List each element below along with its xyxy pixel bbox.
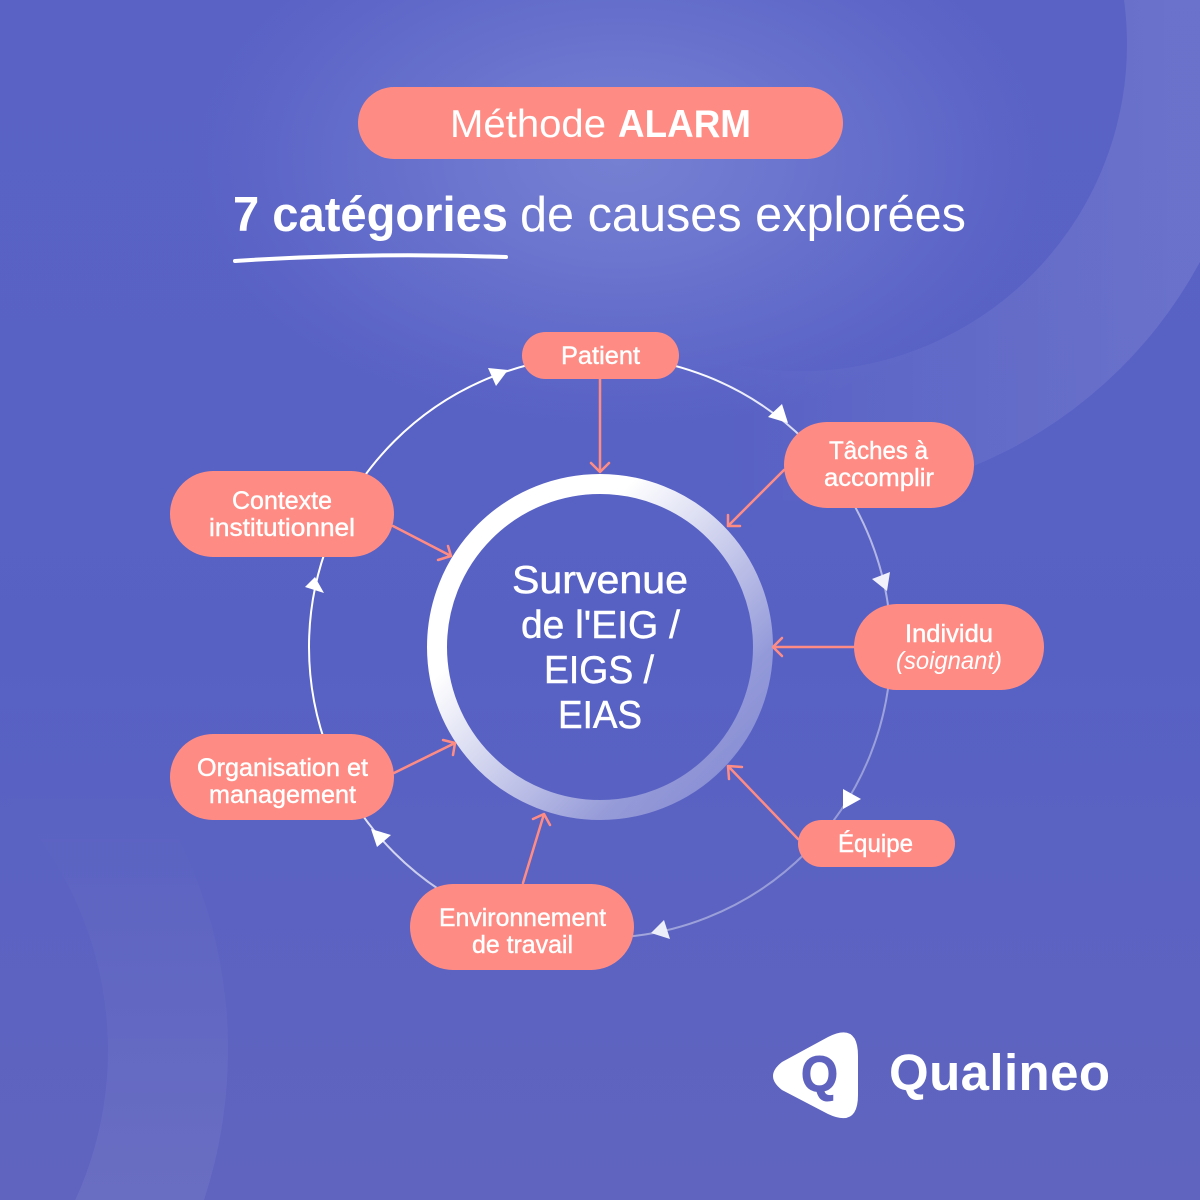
pill: Tâches à accomplir: Tâches à xyxy=(829,437,928,465)
pill: Individu (soignant): Individu xyxy=(905,620,993,648)
pill: Environnement de travail: Environnement xyxy=(439,904,606,932)
title xyxy=(233,188,966,261)
pill: Environnement de travail xyxy=(410,884,634,970)
pill: Individu (soignant) xyxy=(854,604,1044,690)
logo: Qualineo: Qualineo xyxy=(889,1044,1110,1101)
header pill: Méthode ALARM: Méthode xyxy=(450,103,606,146)
central text: EIGS / xyxy=(544,649,654,692)
central ring xyxy=(437,484,763,810)
header pill: Méthode ALARM: ALARM xyxy=(618,103,751,146)
pill: Organisation et management xyxy=(170,734,394,820)
cycle arrowheads xyxy=(305,368,890,939)
pill: Équipe xyxy=(798,820,955,867)
pill: Organisation et management: Organisation et xyxy=(197,754,368,782)
central text: EIAS xyxy=(558,694,642,737)
central text: Survenue xyxy=(512,559,688,602)
pill: Contexte institutionnel xyxy=(170,471,394,557)
pill: Contexte institutionnel: Contexte xyxy=(232,487,332,515)
central text xyxy=(512,559,688,737)
pill: Contexte institutionnel: institutionnel xyxy=(209,514,355,542)
logo: Qualineo xyxy=(773,1032,1110,1118)
pill: Individu (soignant): (soignant) xyxy=(896,647,1002,675)
inward arrows xyxy=(393,379,854,883)
central text: de l'EIG / xyxy=(521,604,680,647)
pill: Tâches à accomplir xyxy=(784,422,974,508)
logo: Qualineo: Q xyxy=(801,1046,838,1102)
title: de causes explorées xyxy=(520,188,966,242)
title: 7 catégories xyxy=(233,188,508,242)
header pill: Méthode ALARM xyxy=(358,87,843,159)
pill: Environnement de travail: de travail xyxy=(472,931,573,959)
pill: Patient xyxy=(522,332,679,379)
orbit cycle circle xyxy=(309,356,891,938)
pill: Tâches à accomplir: accomplir xyxy=(824,464,934,492)
pill: Organisation et management: management xyxy=(209,781,356,809)
pill: Patient: Patient xyxy=(561,342,640,370)
pill: Équipe: Équipe xyxy=(838,829,913,858)
